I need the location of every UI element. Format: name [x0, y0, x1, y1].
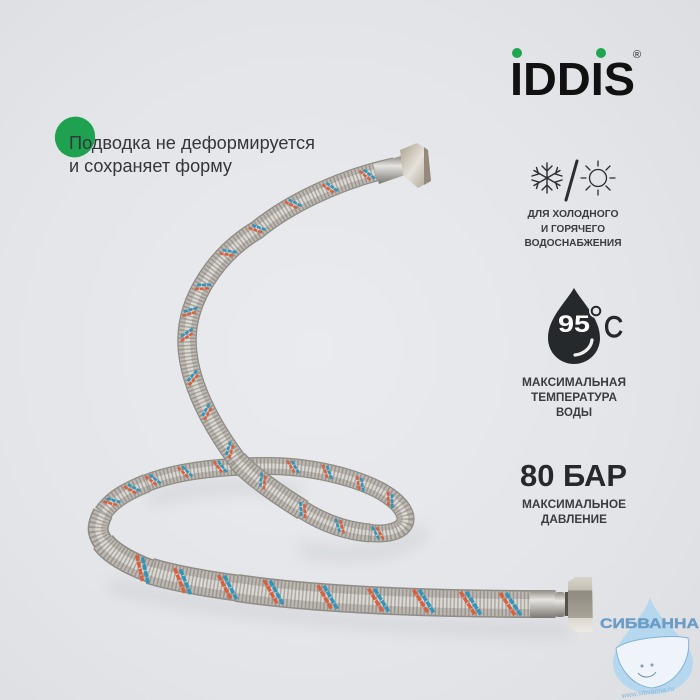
hose segment: lower run: [237, 588, 540, 604]
caption: water supply: [524, 208, 622, 249]
caption: max pressure: МАКСИМАЛЬНОЕ: [522, 497, 626, 511]
caption: water supply: И ГОРЯЧЕГО: [541, 223, 605, 235]
caption: max pressure: ДАВЛЕНИЕ: [541, 512, 607, 526]
watermark url: www.sibvanna.ru: [620, 686, 675, 700]
braid marks: rising arc: [187, 170, 395, 533]
icon: slash: [566, 161, 577, 200]
hose segment: loop return: [303, 510, 370, 533]
icon: sun: [581, 161, 615, 195]
caption: max pressure: [522, 497, 626, 526]
hose shadow: [110, 486, 570, 630]
caption: max temperature: МАКСИМАЛЬНАЯ: [522, 375, 626, 389]
hose segment: crossing: [237, 460, 303, 510]
icon: drop with 95 degrees: 95: [558, 311, 590, 338]
braid marks: small loop: [100, 467, 404, 516]
callout text: Подводка не деформируется: [69, 132, 315, 153]
watermark drop: [613, 597, 693, 694]
watermark name: СИБВАННА: [600, 615, 699, 631]
caption: water supply: ДЛЯ ХОЛОДНОГО: [528, 208, 618, 220]
bottom connector: [530, 577, 593, 632]
callout: green accent: [47, 109, 103, 165]
hose segment: turn into loop: [103, 483, 147, 513]
braid marks: lower run: [125, 560, 530, 604]
braided steel hose: [98, 167, 540, 604]
hose segment: left rise: [103, 542, 150, 571]
hose segment: rising arc: [187, 167, 395, 460]
icon: drop with 95 degrees: C: [604, 311, 623, 344]
caption: water supply: ВОДОСНАБЖЕНИЯ: [524, 237, 622, 249]
watermark bath: [616, 636, 689, 688]
heading: 80 bar: 80 БАР: [520, 458, 627, 493]
caption: max temperature: ВОДЫ: [556, 405, 592, 419]
hose segment: lower left bend: [150, 571, 237, 588]
logo: IDDIS: ®: [633, 49, 641, 61]
watermark: Sibvanna: [600, 597, 699, 700]
hose segment: left turn: [98, 513, 103, 542]
caption: max temperature: [522, 375, 626, 419]
icon: snowflake: [532, 163, 562, 193]
caption: max temperature: ТЕМПЕРАТУРА: [531, 390, 617, 404]
callout text: [69, 132, 315, 176]
icon: drop with 95 degrees: [548, 288, 623, 364]
hose segment: small loop: [147, 466, 406, 533]
logo: IDDIS: IDDIS: [510, 53, 635, 105]
callout text: и сохраняет форму: [69, 155, 233, 176]
watermark face: [638, 664, 656, 677]
top connector: [373, 143, 431, 188]
